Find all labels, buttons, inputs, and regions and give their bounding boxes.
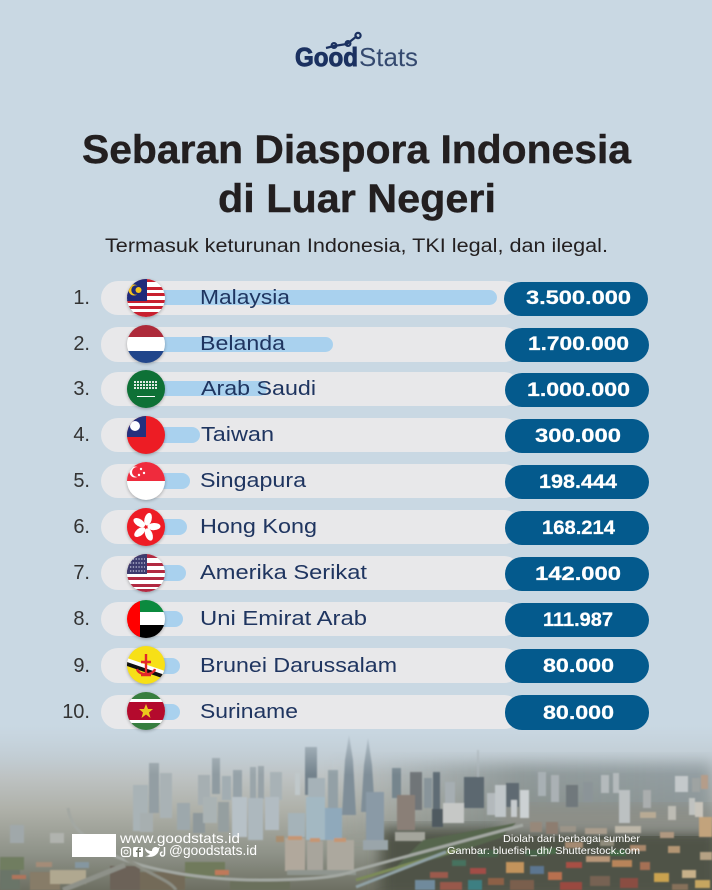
source credits: Gambar: bluefish_dh/ Shutterstock.com — [447, 845, 640, 857]
row 9: Brunei Darussalam: Brunei Darussalam — [200, 655, 397, 677]
row 6: Hong Kong: Hong Kong — [200, 516, 317, 538]
row 2: Belanda: 2. — [73, 333, 90, 355]
row 10: Suriname: Suriname — [200, 701, 298, 723]
left suburb — [10, 825, 24, 843]
subtitle: Termasuk keturunan Indonesia, TKI legal, dan ilegal. — [105, 236, 608, 257]
row 2: Belanda: Belanda — [200, 333, 286, 355]
greenery beside highway — [395, 823, 516, 868]
row 4: Taiwan: Taiwan — [201, 424, 274, 446]
row 2: Belanda — [73, 325, 649, 364]
right neighbourhood roofs — [506, 862, 524, 873]
row 7: Amerika Serikat: 7. — [73, 562, 90, 584]
row 4: Taiwan: 300.000 — [535, 426, 621, 447]
logo trend line icon — [326, 33, 361, 48]
row 5: Singapura: 198.444 — [539, 472, 617, 493]
row 9: Brunei Darussalam — [73, 646, 649, 685]
row 4: Taiwan — [73, 416, 649, 455]
row 5: Singapura: 5. — [73, 470, 90, 492]
flag: United States — [127, 554, 165, 592]
row 2: Belanda: 1.700.000 — [528, 334, 629, 355]
flag: Netherlands — [127, 325, 165, 363]
logo: GoodStats — [295, 33, 418, 72]
row 7: Amerika Serikat: 142.000 — [535, 564, 621, 585]
flag: Saudi Arabia — [127, 370, 165, 408]
row 3: Arab Saudi: Arab Saudi — [201, 378, 316, 400]
footer website and social handles — [119, 830, 257, 858]
flag: Brunei — [127, 646, 165, 684]
row 5: Singapura: Singapura — [200, 470, 307, 492]
row 8: Uni Emirat Arab: 8. — [73, 608, 90, 630]
logo wordmark: Good — [295, 42, 358, 72]
highways — [68, 808, 523, 880]
flag: Hong Kong — [127, 508, 165, 546]
source credits: Diolah dari berbagai sumber — [503, 833, 641, 845]
row 1: Malaysia: 3.500.000 — [526, 288, 631, 309]
row 7: Amerika Serikat — [73, 554, 649, 593]
city skyline photo — [0, 725, 712, 890]
flag: Suriname — [127, 692, 165, 730]
row 10: Suriname — [62, 692, 649, 731]
title — [82, 128, 632, 221]
row 1: Malaysia: 1. — [73, 287, 90, 309]
row 1: Malaysia — [73, 279, 648, 318]
row 4: Taiwan: 4. — [73, 424, 90, 446]
title: Sebaran Diaspora Indonesia — [82, 128, 632, 172]
title: di Luar Negeri — [218, 177, 496, 221]
distant towers — [133, 785, 148, 831]
logo wordmark: Stats — [359, 42, 418, 72]
footer website and social handles: www.goodstats.id — [119, 830, 240, 846]
row 8: Uni Emirat Arab: 111.987 — [543, 610, 613, 631]
row 10: Suriname: 80.000 — [543, 703, 614, 724]
social icons — [122, 847, 164, 857]
row 1: Malaysia: Malaysia — [200, 287, 291, 309]
row 7: Amerika Serikat: Amerika Serikat — [200, 562, 368, 584]
row 9: Brunei Darussalam: 80.000 — [543, 656, 614, 677]
row 3: Arab Saudi: 1.000.000 — [527, 380, 630, 401]
row 6: Hong Kong: 6. — [73, 516, 90, 538]
waterfront low-rise blocks — [285, 838, 305, 871]
row 3: Arab Saudi — [73, 370, 649, 409]
flag: Malaysia — [127, 279, 165, 317]
row 10: Suriname: 10. — [62, 701, 90, 723]
logo wordmark — [295, 42, 418, 72]
flag: Taiwan — [127, 416, 165, 454]
row 6: Hong Kong — [73, 508, 649, 547]
flag: UAE — [127, 600, 165, 638]
mid towers — [177, 803, 190, 830]
flag: Singapore — [127, 462, 165, 500]
row 6: Hong Kong: 168.214 — [542, 518, 615, 539]
row 3: Arab Saudi: 3. — [73, 378, 90, 400]
source credits — [447, 833, 641, 857]
row 5: Singapura — [73, 462, 649, 501]
footer website and social handles: @goodstats.id — [169, 842, 257, 858]
row 8: Uni Emirat Arab: Uni Emirat Arab — [200, 608, 367, 630]
row 8: Uni Emirat Arab — [73, 600, 649, 639]
footer logo placeholder — [72, 834, 116, 857]
row 9: Brunei Darussalam: 9. — [73, 655, 90, 677]
